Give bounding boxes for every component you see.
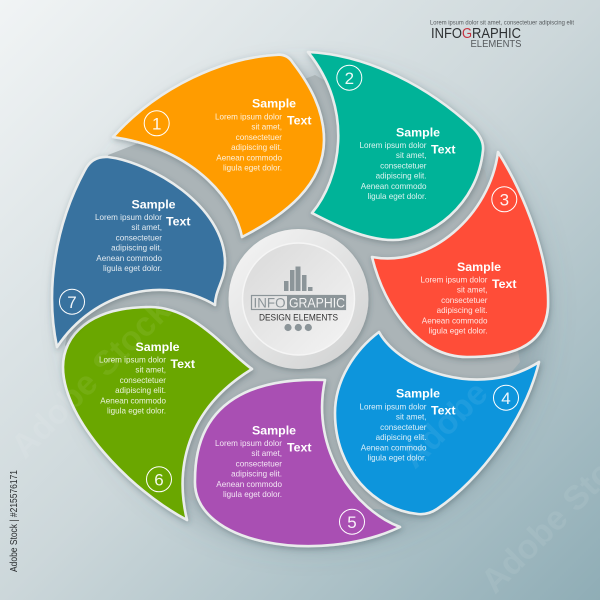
green heading	[136, 340, 195, 371]
green body text: Aenean commodo	[100, 396, 166, 405]
green heading: Sample	[136, 340, 180, 354]
blue body text: Lorem ipsum dolor	[359, 402, 427, 412]
number 6: 6	[154, 470, 164, 489]
green heading: Text	[170, 357, 195, 371]
green shape	[63, 307, 252, 520]
orange body text: adipiscing elit.	[231, 143, 282, 152]
red heading: Text	[492, 277, 517, 291]
number 2	[337, 65, 362, 90]
purple heading	[252, 424, 312, 454]
red body text: Aenean commodo	[422, 316, 488, 325]
panel: 1 orange	[113, 55, 324, 237]
faint watermark	[4, 292, 600, 600]
teal body text: adipiscing elit.	[376, 172, 426, 181]
dark blue body text: ligula eget dolor.	[103, 264, 162, 273]
number 1	[144, 111, 169, 136]
red heading	[457, 260, 517, 291]
faint watermark: Adobe Stock	[4, 292, 178, 466]
purple shape	[195, 380, 400, 546]
design elements label: DESIGN ELEMENTS	[259, 312, 338, 324]
blue heading: Sample	[396, 386, 440, 400]
blue body text: ligula eget dolor.	[368, 454, 426, 462]
purple heading: Sample	[252, 424, 296, 438]
teal heading	[396, 126, 456, 156]
blue heading	[396, 386, 456, 418]
three dots	[284, 324, 312, 331]
orange body text: Lorem ipsum dolor	[215, 112, 282, 122]
orange heading	[252, 96, 312, 128]
dark blue body text: adipiscing elit.	[111, 244, 162, 253]
blue heading: Text	[431, 404, 456, 418]
purple body text: ligula eget dolor.	[223, 490, 282, 499]
orange heading: Text	[287, 114, 312, 128]
teal body text: sit amet,	[396, 151, 426, 160]
grey groove base	[65, 75, 520, 510]
dark blue heading	[132, 198, 191, 228]
panel: 3 red	[372, 152, 548, 357]
dark blue body text: consectetuer	[116, 233, 162, 242]
infographic wordmark: INFO	[254, 294, 286, 310]
number 4: 4	[501, 389, 511, 408]
panel: 7 dark blue	[52, 157, 225, 347]
teal body text: ligula eget dolor.	[368, 192, 426, 201]
red body text: ligula eget dolor.	[429, 326, 488, 336]
red shape	[372, 152, 548, 357]
orange body text: Aenean commodo	[216, 153, 282, 162]
red heading: Sample	[457, 260, 501, 274]
infographic wordmark	[252, 294, 346, 310]
number 1: 1	[152, 114, 161, 133]
dark blue heading: Text	[166, 214, 191, 228]
blue body text: consectetuer	[380, 423, 427, 432]
orange body text: ligula eget dolor.	[223, 164, 282, 172]
green body text: adipiscing elit.	[115, 386, 166, 395]
red body text: sit amet,	[457, 286, 488, 295]
subtitle: ELEMENTS	[470, 39, 522, 50]
purple body text: adipiscing elit.	[231, 470, 282, 479]
red body text: adipiscing elit.	[437, 306, 488, 315]
outer ring	[228, 229, 368, 369]
number 7: 7	[67, 293, 77, 312]
title: INFOGRAPHIC	[431, 26, 521, 42]
green body text: sit amet,	[135, 366, 166, 375]
purple body text: consectetuer	[236, 459, 282, 468]
inner disc	[242, 243, 354, 355]
number 3	[492, 187, 517, 212]
blue body text: sit amet,	[396, 413, 426, 422]
panel: 4 blue	[335, 332, 539, 514]
purple body text: sit amet,	[251, 449, 282, 458]
number 3: 3	[500, 190, 509, 209]
panel: 6 green	[63, 307, 252, 520]
purple body text: Aenean commodo	[216, 480, 282, 489]
centre badge	[228, 229, 368, 369]
infographic wordmark: GRAPHIC	[289, 294, 345, 310]
number 7	[60, 289, 84, 314]
number 5: 5	[347, 513, 357, 532]
soft wheel shadow	[70, 70, 546, 546]
teal heading: Text	[431, 142, 456, 156]
orange body text: consectetuer	[236, 133, 282, 142]
blue body text: Aenean commodo	[361, 443, 427, 452]
dark blue body text: sit amet,	[131, 223, 162, 232]
teal body text: Lorem ipsum dolor	[359, 141, 427, 150]
teal heading: Sample	[396, 126, 440, 140]
red body text: consectetuer	[441, 296, 488, 305]
teal body text: consectetuer	[380, 161, 427, 170]
purple heading: Text	[287, 440, 312, 454]
number 4	[494, 385, 518, 410]
dark blue heading: Sample	[132, 198, 176, 212]
faint watermark: Adobe	[394, 374, 495, 476]
green body text: ligula eget dolor.	[107, 406, 166, 416]
dark blue body text: Aenean commodo	[96, 254, 162, 263]
purple body text: Lorem ipsum dolor	[215, 439, 282, 448]
orange body text: sit amet,	[251, 123, 282, 132]
icon: bar chart	[284, 266, 312, 291]
stock credit strip: Adobe Stock | #215576171	[9, 470, 20, 572]
orange shape	[113, 55, 324, 237]
dark blue body text: Lorem ipsum dolor	[95, 213, 162, 222]
caption: Lorem ipsum dolor sit amet, consectetuer adipiscing elit	[430, 20, 574, 26]
blue body text: adipiscing elit.	[376, 433, 426, 442]
number 2: 2	[345, 69, 354, 88]
green body text: consectetuer	[120, 376, 166, 385]
number 6	[146, 467, 172, 492]
green body text: Lorem ipsum dolor	[99, 356, 166, 364]
panel: 2 teal	[308, 52, 483, 240]
red body text: Lorem ipsum dolor	[420, 276, 488, 284]
teal shape	[308, 52, 483, 240]
teal body text: Aenean commodo	[361, 182, 427, 191]
number 5	[340, 509, 364, 534]
panel: 5 purple	[195, 380, 400, 546]
top right title block	[430, 20, 574, 50]
dark blue shape	[52, 157, 225, 347]
orange heading: Sample	[252, 96, 296, 110]
blue shape	[335, 332, 539, 514]
